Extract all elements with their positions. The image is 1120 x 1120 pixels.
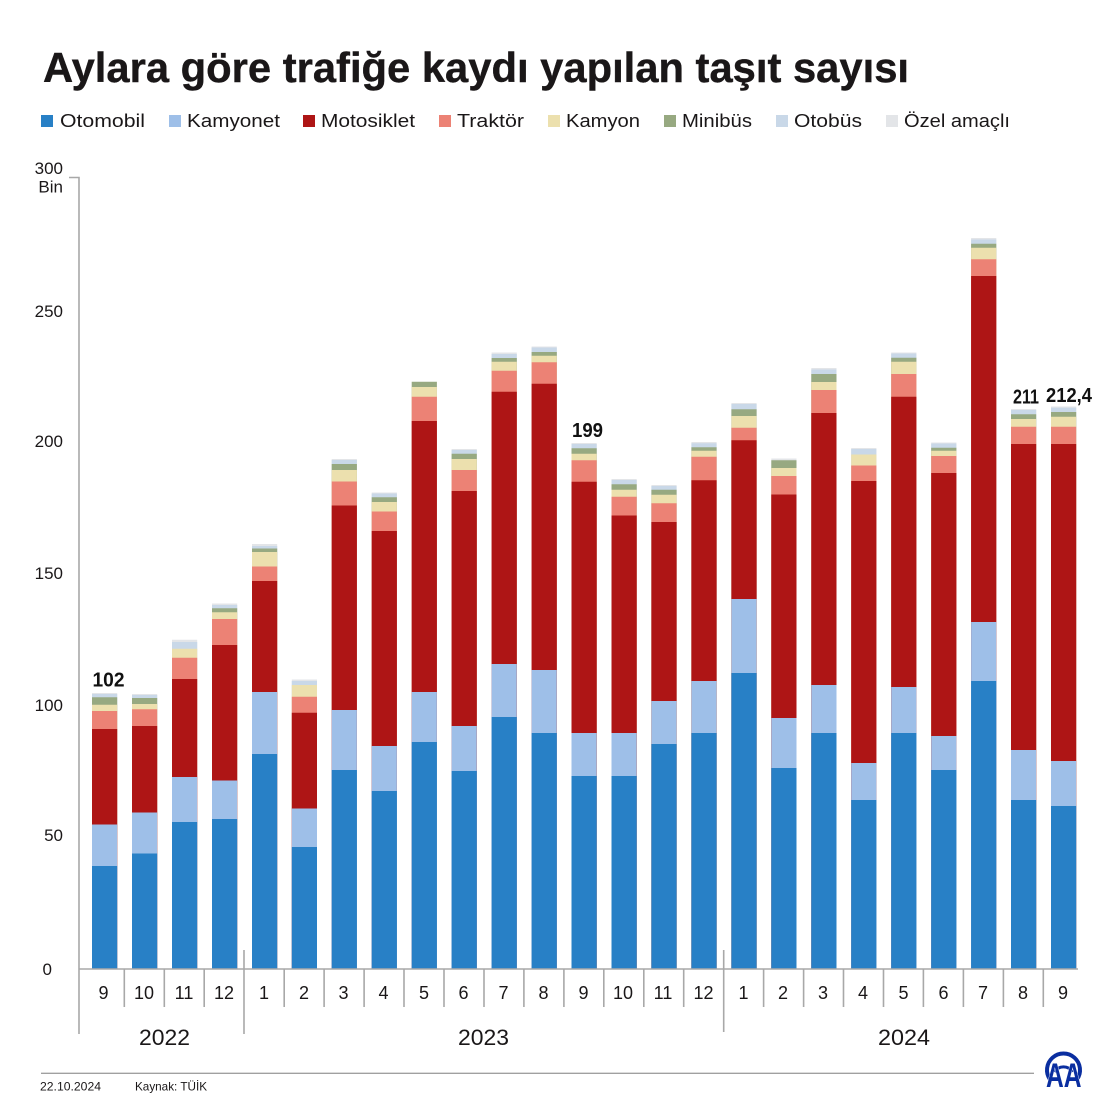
legend: Traktör: Traktör xyxy=(457,110,524,131)
month labels: 3 xyxy=(338,983,349,1003)
month labels: 12 xyxy=(214,983,234,1003)
bar: 2022-12 xyxy=(212,604,237,969)
bar: 2023-5 xyxy=(412,382,437,969)
legend: Otobüs xyxy=(776,110,862,131)
legend: Kamyonet: Kamyonet xyxy=(187,110,280,131)
bar: 2024-6 xyxy=(931,442,956,969)
legend: Motosiklet: Motosiklet xyxy=(321,110,415,131)
footer source: Kaynak: TÜİK xyxy=(135,1080,207,1094)
stacked bar chart xyxy=(92,238,1076,969)
bar: 2024-3 xyxy=(811,368,836,969)
year labels: 2022 xyxy=(139,1025,190,1050)
month labels: 6 xyxy=(938,983,949,1003)
bar: 2024-1 xyxy=(731,403,757,969)
bar: 2024-8 xyxy=(1011,409,1036,969)
bar: 2023-6 xyxy=(452,449,477,969)
y axis labels: 200 xyxy=(35,432,63,451)
month labels: 8 xyxy=(1018,983,1028,1003)
icon: AA logo xyxy=(1046,1054,1082,1095)
month labels: 11 xyxy=(175,983,193,1003)
bar: 2024-4 xyxy=(851,448,876,969)
y axis labels: Bin xyxy=(38,178,63,196)
month labels: 3 xyxy=(818,983,828,1003)
month labels: 10 xyxy=(134,983,154,1003)
month labels: 9 xyxy=(578,983,589,1003)
year labels: 2024 xyxy=(878,1025,930,1050)
axes and ticks xyxy=(69,178,1078,1034)
bar: 2023-1 xyxy=(252,544,277,969)
bar: 2023-4 xyxy=(372,492,397,969)
y axis labels: 0 xyxy=(43,960,52,979)
bar: 2023-8 xyxy=(532,346,557,969)
legend: Kamyon: Kamyon xyxy=(566,110,640,131)
month labels: 12 xyxy=(693,983,714,1003)
legend: Traktör xyxy=(439,110,524,131)
bar: 2024-2 xyxy=(771,458,796,969)
month labels: 9 xyxy=(98,983,109,1003)
month labels: 10 xyxy=(613,983,633,1003)
bar: 2023-3 xyxy=(332,459,357,969)
bar: 2022-10 xyxy=(132,694,157,969)
footer date: 22.10.2024 xyxy=(40,1080,101,1094)
month labels: 1 xyxy=(259,983,269,1003)
bar: 2024-5 xyxy=(891,352,916,969)
bar: 2022-9 xyxy=(92,693,117,969)
bar: 2022-11 xyxy=(172,640,197,969)
bar: 2023-7 xyxy=(492,352,517,969)
value labels: 212,4 xyxy=(1046,385,1093,407)
year labels xyxy=(139,1025,930,1050)
legend: Özel amaçlı: Özel amaçlı xyxy=(904,110,1010,131)
legend xyxy=(41,110,1010,131)
y axis labels: 250 xyxy=(35,302,63,321)
month labels: 8 xyxy=(538,983,549,1003)
icon: AA logo: AA xyxy=(1046,1057,1082,1095)
y axis labels: 50 xyxy=(44,826,63,845)
value labels: 211 xyxy=(1013,386,1039,408)
month labels: 1 xyxy=(738,983,749,1003)
value labels xyxy=(92,385,1093,692)
month labels xyxy=(98,983,1068,1003)
month labels: 2 xyxy=(299,983,309,1003)
bar: 2023-9 xyxy=(572,443,597,969)
bar: 2023-2 xyxy=(292,680,317,969)
title: Aylara göre trafiğe kaydı yapılan taşıt sayısı xyxy=(43,44,909,91)
bar: 2023-11 xyxy=(651,485,677,969)
bar: 2023-10 xyxy=(612,479,637,969)
footer rule xyxy=(41,1072,1034,1074)
month labels: 11 xyxy=(654,983,672,1003)
month labels: 6 xyxy=(458,983,469,1003)
bar: 2024-7 xyxy=(971,238,996,969)
legend: Minibüs: Minibüs xyxy=(682,110,752,131)
month labels: 5 xyxy=(898,983,909,1003)
month labels: 4 xyxy=(858,983,868,1003)
bar: 2024-9 xyxy=(1051,406,1076,969)
month labels: 4 xyxy=(378,983,389,1003)
bar: 2023-12 xyxy=(691,442,717,969)
y axis labels: 150 xyxy=(35,564,63,583)
value labels: 199 xyxy=(572,420,603,442)
month labels: 7 xyxy=(978,983,988,1003)
month labels: 2 xyxy=(778,983,788,1003)
month labels: 9 xyxy=(1058,983,1068,1003)
year labels: 2023 xyxy=(458,1025,509,1050)
legend: Otobüs: Otobüs xyxy=(794,110,862,131)
month labels: 7 xyxy=(498,983,509,1003)
y axis labels: 300 xyxy=(35,159,63,178)
month labels: 5 xyxy=(419,983,429,1003)
y axis labels: 100 xyxy=(35,696,63,715)
y axis labels xyxy=(35,159,63,979)
value labels: 102 xyxy=(92,670,124,692)
legend: Otomobil: Otomobil xyxy=(60,110,145,131)
